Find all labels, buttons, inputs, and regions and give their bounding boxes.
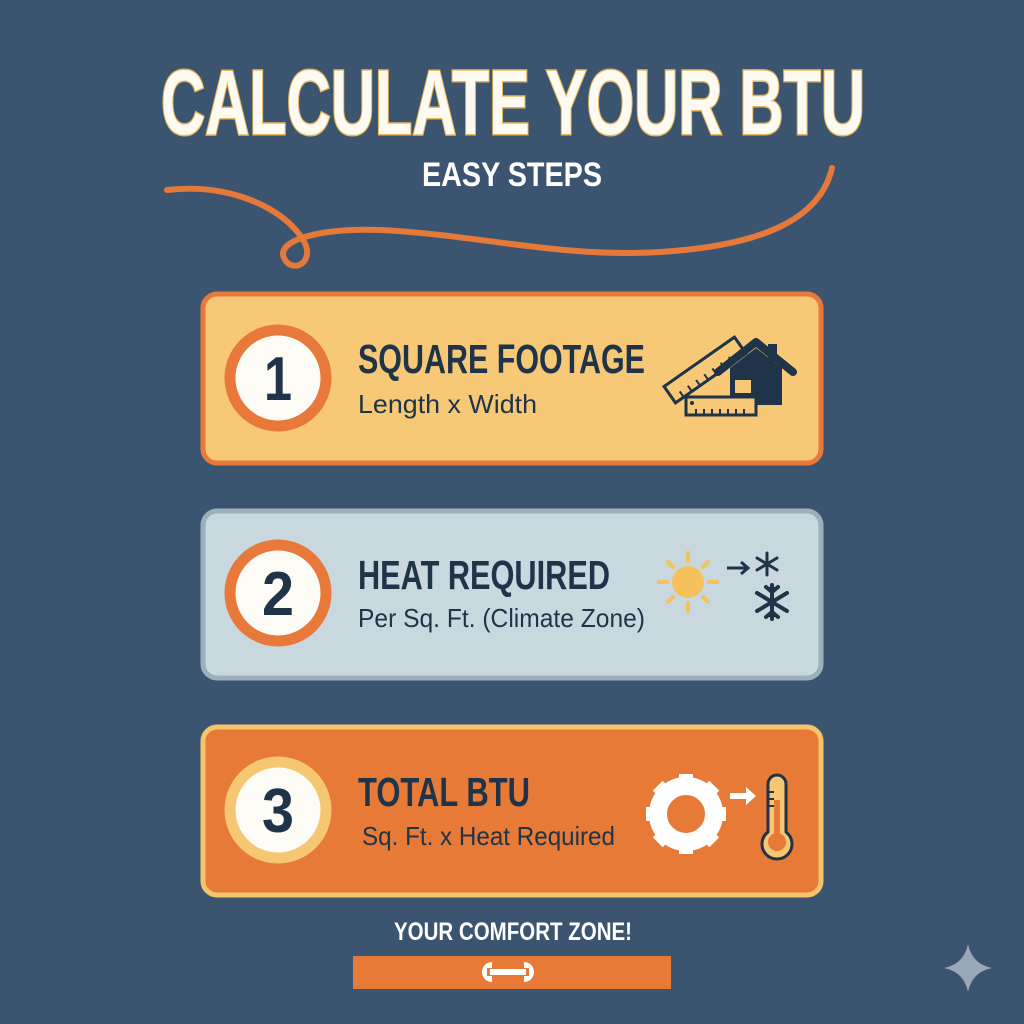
step number 2 (230, 545, 326, 641)
panel: step 1 square footage (203, 294, 821, 463)
heading: square footage: SQUARE FOOTAGE (358, 336, 645, 382)
icon: sparkle (944, 944, 992, 992)
icon: rulers and house (664, 337, 793, 415)
footer text: YOUR COMFORT ZONE! (394, 918, 632, 946)
step number 3: 3 (262, 777, 294, 846)
icon: gear to thermometer (646, 774, 792, 859)
subtitle: EASY STEPS (422, 156, 602, 194)
step number 3 (230, 762, 326, 858)
text: length x width: Length x Width (358, 389, 537, 419)
decorative squiggle (167, 168, 832, 266)
heading: heat required: HEAT REQUIRED (358, 552, 610, 598)
step number 2: 2 (262, 560, 294, 629)
step number 1 (230, 330, 326, 426)
text: formula: Sq. Ft. x Heat Required (362, 821, 615, 851)
text: per sq ft: Per Sq. Ft. (Climate Zone) (358, 603, 645, 633)
step number 1: 1 (264, 345, 292, 414)
footer bar with wrench icon (353, 956, 671, 989)
panel: step 3 total btu (203, 727, 821, 895)
panel: step 2 heat required (203, 511, 821, 678)
icon: wrench (482, 962, 534, 982)
heading: total btu: TOTAL BTU (358, 769, 530, 815)
icon: sun to snowflakes (659, 553, 787, 619)
